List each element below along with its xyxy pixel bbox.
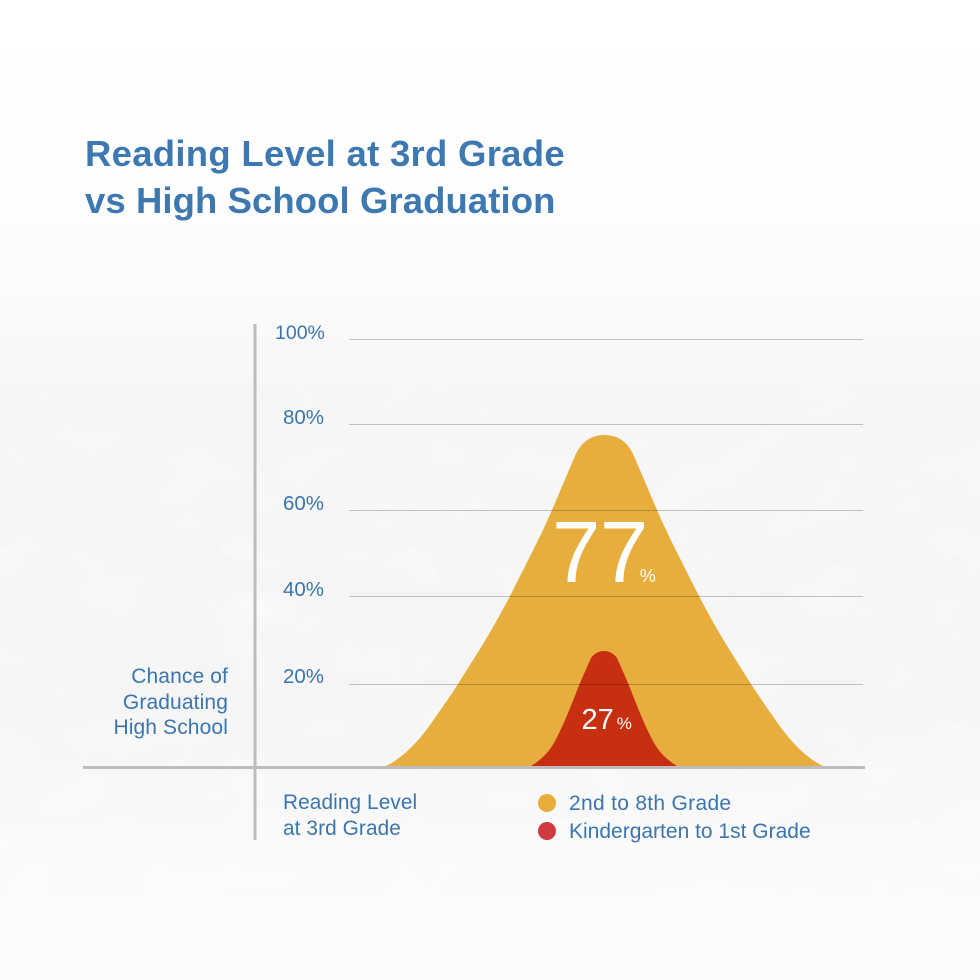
y axis labels: 60% <box>283 492 324 515</box>
legend text: kindergarten to 1st grade: Kindergarten to 1st Grade <box>569 820 811 843</box>
axes <box>83 324 865 840</box>
y axis labels: 40% <box>283 578 324 601</box>
title <box>85 133 565 221</box>
value: 27%: 27% <box>582 704 632 736</box>
x axis title: at 3rd Grade <box>283 817 401 840</box>
y axis title <box>113 665 228 739</box>
y axis labels: 80% <box>283 406 324 429</box>
x axis title <box>283 791 417 840</box>
value: 77%: 77% <box>552 504 656 601</box>
y axis title: Chance of <box>131 665 228 688</box>
y axis labels: 100% <box>275 322 325 344</box>
y axis title: Graduating <box>123 691 228 714</box>
legend text: 2nd to 8th grade: 2nd to 8th Grade <box>569 792 731 815</box>
legend markers <box>538 794 556 840</box>
title: Reading Level at 3rd Grade <box>85 133 565 174</box>
yellow area: 2nd to 8th grade <box>386 435 823 766</box>
title: vs High School Graduation <box>85 180 555 221</box>
y axis labels: 20% <box>283 665 324 688</box>
red area: kindergarten to 1st grade <box>531 651 677 766</box>
x axis title: Reading Level <box>283 791 417 814</box>
y axis title: High School <box>113 716 228 739</box>
